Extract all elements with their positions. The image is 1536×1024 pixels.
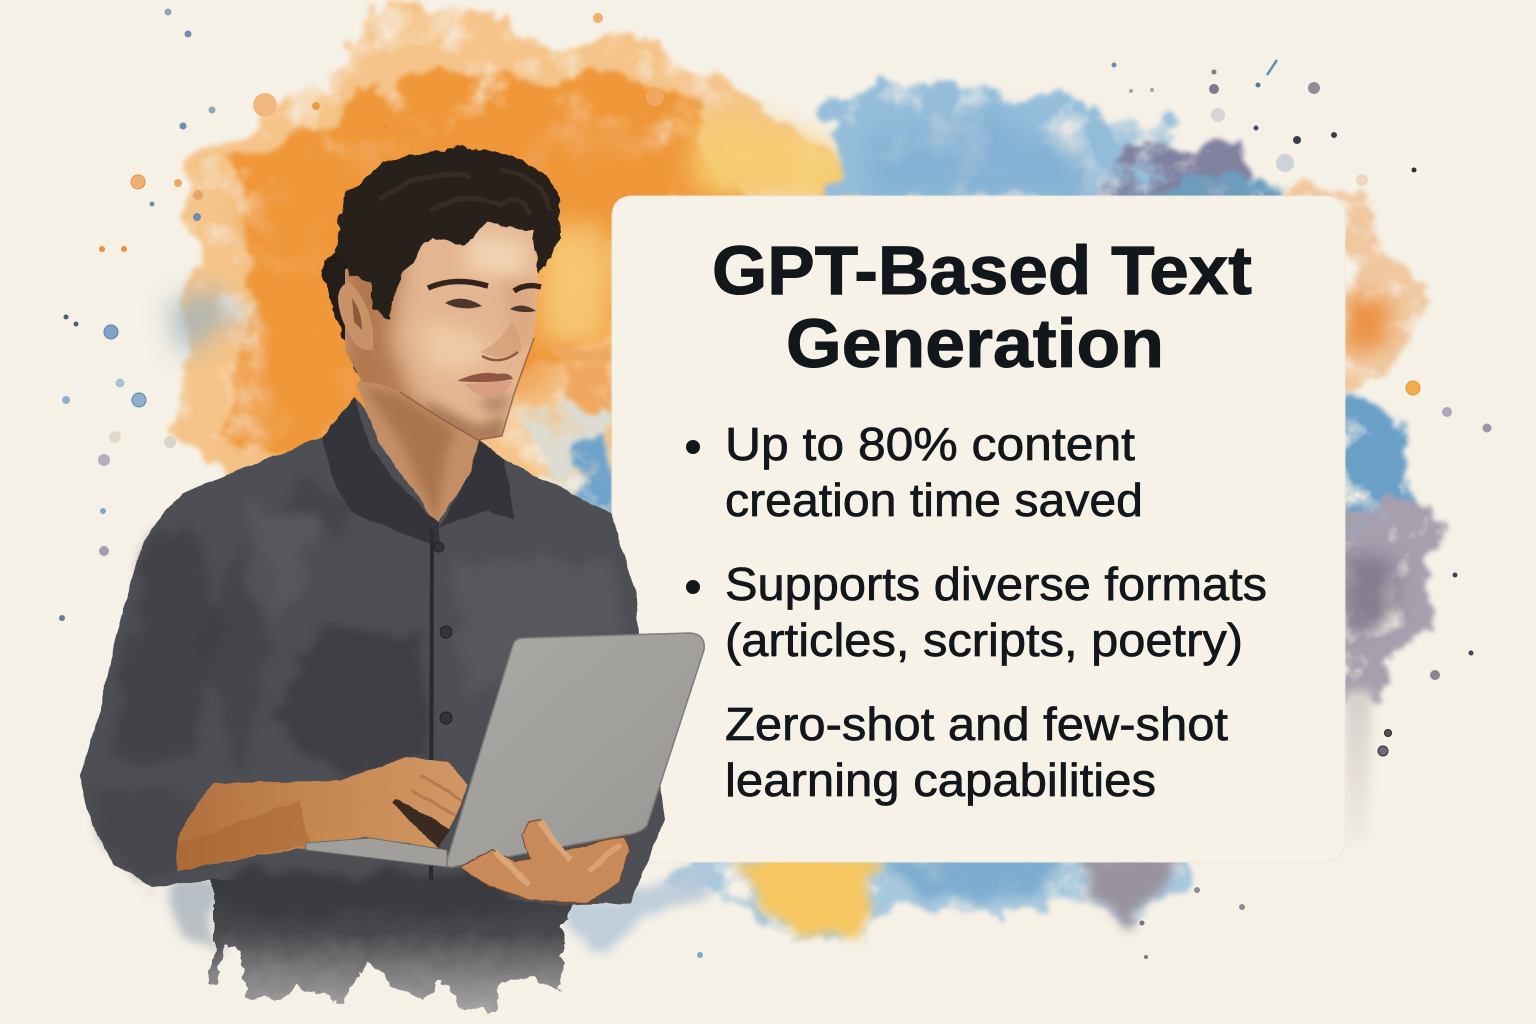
forearm and typing hand bbox=[177, 757, 468, 870]
grey wash below figure bbox=[170, 880, 215, 950]
bottom washes bbox=[665, 855, 1190, 945]
title bbox=[712, 232, 1252, 382]
bullet list: Zero-shot and few-shot bbox=[725, 698, 1228, 750]
bullet list: creation time saved bbox=[725, 474, 1143, 526]
title: GPT-Based Text bbox=[712, 232, 1252, 309]
pale wash near collar bbox=[516, 384, 612, 496]
laptop lid bbox=[447, 633, 704, 867]
eyebrows bbox=[428, 281, 541, 291]
solid orange base behind head bbox=[245, 110, 660, 440]
text card bbox=[612, 196, 1345, 862]
purple wash top bbox=[1090, 140, 1245, 205]
blue wash right bbox=[1340, 395, 1417, 540]
bullet list: learning capabilities bbox=[725, 754, 1156, 806]
shirt shadows bbox=[85, 470, 520, 910]
shirt collar bbox=[321, 397, 514, 548]
shirt highlights bbox=[245, 500, 620, 700]
bullet list: Supports diverse formats bbox=[725, 558, 1267, 610]
jaw line bbox=[400, 338, 534, 440]
bullet list: Up to 80% content bbox=[725, 418, 1135, 470]
pale fade right bbox=[1345, 690, 1372, 845]
bullet list: (articles, scripts, poetry) bbox=[725, 614, 1243, 666]
orange core right bbox=[1345, 293, 1390, 355]
shirt buttons bbox=[434, 542, 452, 724]
purple wash right bbox=[1340, 500, 1444, 700]
orange blot near collar bbox=[555, 345, 612, 410]
laptop base bbox=[306, 838, 447, 867]
person with laptop bbox=[80, 148, 704, 1012]
head bbox=[330, 200, 550, 450]
bullet list bbox=[686, 418, 1267, 806]
grey-blue patch at left bbox=[165, 285, 240, 345]
neck bbox=[357, 360, 505, 523]
blue near collar bbox=[570, 440, 612, 520]
ear bbox=[338, 283, 373, 350]
card edge bbox=[612, 196, 1345, 862]
nose bbox=[480, 322, 521, 357]
back of hair bbox=[323, 220, 385, 378]
holding hand bbox=[460, 820, 630, 903]
front hair bbox=[335, 148, 562, 320]
saturated orange wash bbox=[225, 70, 740, 460]
watercolor splash background bbox=[165, 5, 1444, 950]
mouth bbox=[457, 373, 513, 382]
pale orange wash bbox=[175, 5, 860, 500]
yellow wash bbox=[690, 120, 860, 196]
eyes bbox=[445, 299, 536, 312]
shirt hem drips bbox=[208, 860, 566, 1012]
blue wash top bbox=[830, 80, 1283, 200]
shirt body bbox=[80, 397, 664, 905]
button placket bbox=[431, 530, 432, 880]
title: Generation bbox=[786, 305, 1164, 382]
peach wash right bbox=[1283, 187, 1427, 395]
